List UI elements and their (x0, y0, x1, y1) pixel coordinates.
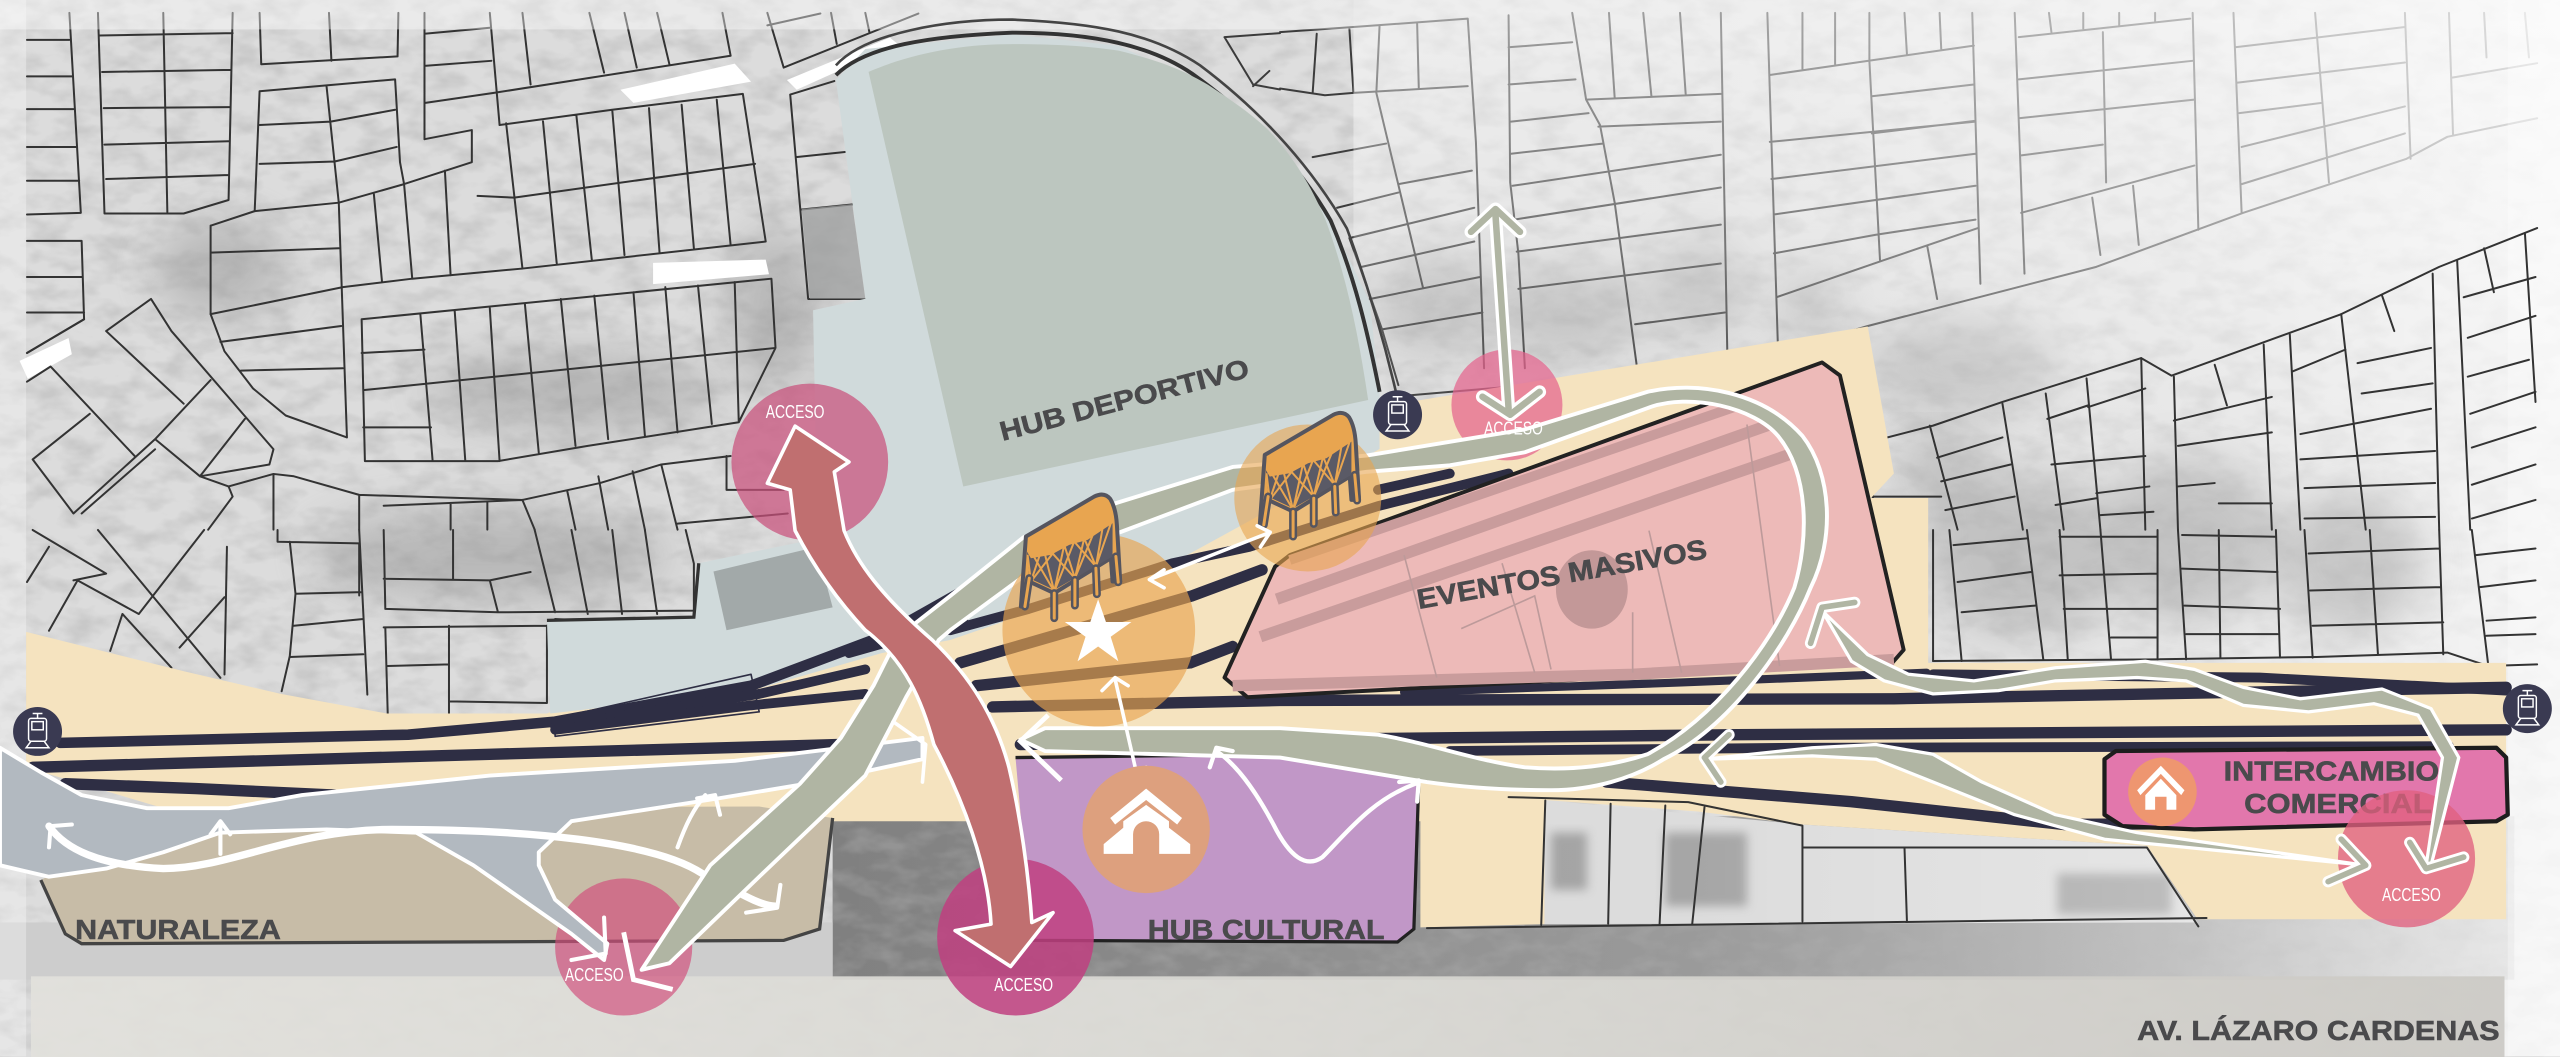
panel: intercambio comercial (2104, 748, 2508, 829)
green arrow to intercambio west (1704, 735, 2366, 882)
parcel lines: south east lower (1933, 530, 2537, 666)
label: eventos masivos: EVENTOS MASIVOS (1414, 533, 1709, 615)
panel: eventos masivos (1224, 362, 1904, 697)
access labels: ACCESO (1484, 417, 1543, 438)
icon: train west (13, 707, 62, 756)
access labels: ACCESO (994, 974, 1053, 995)
access labels: ACCESO (766, 401, 824, 422)
label: intercambio comercial: INTERCAMBIO (2224, 755, 2439, 786)
parcel lines: south east blocks (1868, 228, 2537, 530)
icon: train east (2503, 684, 2552, 733)
icon: structure tower west (1021, 495, 1120, 618)
label: intercambio comercial: COMERCIAL (2244, 788, 2432, 819)
parcel lines: north east (1280, 13, 2537, 395)
icon: structure tower east (1260, 413, 1359, 537)
icon: cultural house (1082, 766, 1210, 893)
white linking arrows (893, 526, 1419, 861)
access labels: ACCESO (2382, 884, 2441, 905)
green arrow to eventos (1811, 602, 2464, 869)
label: avenue name: AV. LÁZARO CARDENAS (2137, 1015, 2500, 1046)
orange node circles (1002, 424, 1381, 727)
avenue strip (31, 976, 2504, 1057)
photo shading of the south east blocks (1894, 433, 2424, 637)
parcel edges over beige (1427, 797, 2207, 928)
icon: train centre (1373, 390, 1422, 439)
beige railway corridor (26, 327, 2506, 927)
label: hub cultural: HUB CULTURAL (1148, 914, 1385, 945)
parcel lines: north west (27, 13, 1280, 530)
panel: hub cultural (1016, 754, 1419, 945)
white road gaps in photo (20, 38, 898, 379)
access circles (555, 349, 2475, 1016)
parcel lines: south west (27, 530, 698, 716)
icon: small house (2128, 758, 2197, 826)
green main circulation road (624, 388, 1827, 989)
railway tracks (33, 473, 2506, 824)
access labels: ACCESO (565, 964, 624, 985)
icon: star (1065, 599, 1131, 661)
green arrow north access (1471, 209, 1540, 415)
grey-blue river flow (0, 738, 922, 960)
label: hub deportivo: HUB DEPORTIVO (996, 353, 1252, 447)
panel: naturaleza (41, 807, 833, 945)
red main access arrow (767, 426, 1053, 967)
panel: hub deportivo (547, 20, 1396, 713)
arrows: river branches (49, 795, 780, 960)
access labels (565, 401, 2441, 995)
label: naturaleza: NATURALEZA (75, 914, 281, 945)
